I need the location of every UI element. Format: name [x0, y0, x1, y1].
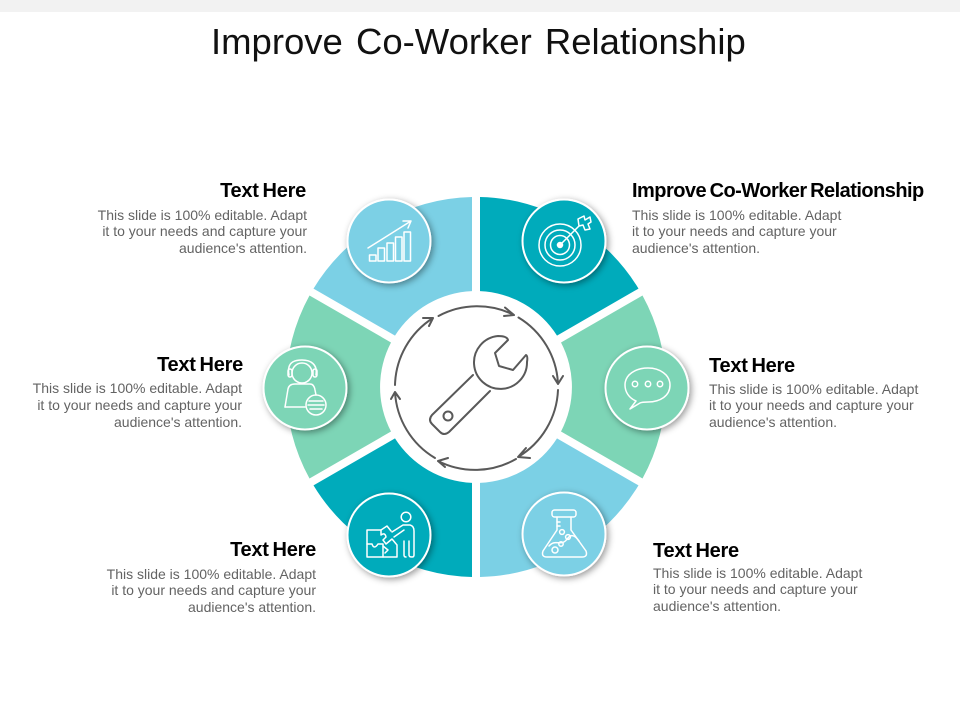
- text block: bottom right: audience's attention.: [653, 598, 781, 614]
- heading: bottom right: Text Here: [653, 540, 739, 562]
- panel: left segment: [33, 296, 391, 478]
- text block: left: This slide is 100% editable. Adapt: [33, 380, 242, 396]
- panel: top right segment: [480, 180, 924, 336]
- text block: right: audience's attention.: [709, 414, 837, 430]
- icon: rising bar chart: [368, 221, 411, 261]
- panel: bottom left segment: [107, 438, 472, 615]
- text block: left: [33, 380, 242, 430]
- text block: top left: This slide is 100% editable. Adapt: [98, 207, 307, 223]
- icon: wrench: [430, 336, 527, 434]
- text block: top left: it to your needs and capture your: [102, 223, 307, 239]
- icon: person assembling puzzle: [367, 512, 414, 557]
- cycle arrows: [391, 306, 563, 470]
- text block: right: This slide is 100% editable. Adapt: [709, 381, 918, 397]
- icon: speech bubble: [625, 368, 670, 409]
- text block: top right: This slide is 100% editable. Adapt: [632, 207, 841, 223]
- text block: top right: it to your needs and capture your: [632, 223, 837, 239]
- text block: right: [709, 381, 918, 430]
- panel: right segment: [561, 296, 918, 478]
- text block: bottom left: This slide is 100% editable. Adapt: [107, 566, 316, 582]
- heading: right: Text Here: [709, 355, 795, 377]
- text block: bottom right: it to your needs and capture your: [653, 581, 858, 597]
- text block: bottom right: This slide is 100% editable. Adapt: [653, 565, 862, 581]
- panel: bottom right segment: [480, 438, 862, 614]
- badge: top right: [522, 200, 606, 282]
- heading: left: Text Here: [157, 354, 243, 376]
- text block: bottom left: it to your needs and capture your: [111, 582, 316, 598]
- icon: support agent with headset: [285, 360, 326, 415]
- text block: left: audience's attention.: [114, 414, 242, 430]
- heading: top left: Text Here: [220, 180, 306, 202]
- text block: top right: [632, 207, 841, 256]
- text block: bottom left: [107, 566, 316, 615]
- central cycle with wrench: [391, 306, 563, 470]
- title: Improve Co-Worker Relationship: [211, 21, 746, 62]
- badge: right: [606, 346, 688, 430]
- badge: bottom left: [348, 494, 430, 576]
- text block: left: it to your needs and capture your: [37, 397, 242, 413]
- text block: bottom left: audience's attention.: [188, 599, 316, 615]
- icon: target with arrow: [539, 216, 591, 266]
- text block: top right: audience's attention.: [632, 240, 760, 256]
- badge: left: [264, 346, 346, 430]
- text block: right: it to your needs and capture your: [709, 397, 914, 413]
- badge: top left: [348, 200, 430, 282]
- panel: top left segment: [98, 180, 472, 336]
- icon: flask: [542, 510, 586, 557]
- text block: top left: audience's attention.: [179, 240, 307, 256]
- heading: top right: Improve Co-Worker Relationship: [632, 180, 924, 202]
- text block: top left: [98, 207, 307, 256]
- text block: bottom right: [653, 565, 862, 614]
- badge: bottom right: [522, 492, 606, 576]
- heading: bottom left: Text Here: [230, 539, 316, 561]
